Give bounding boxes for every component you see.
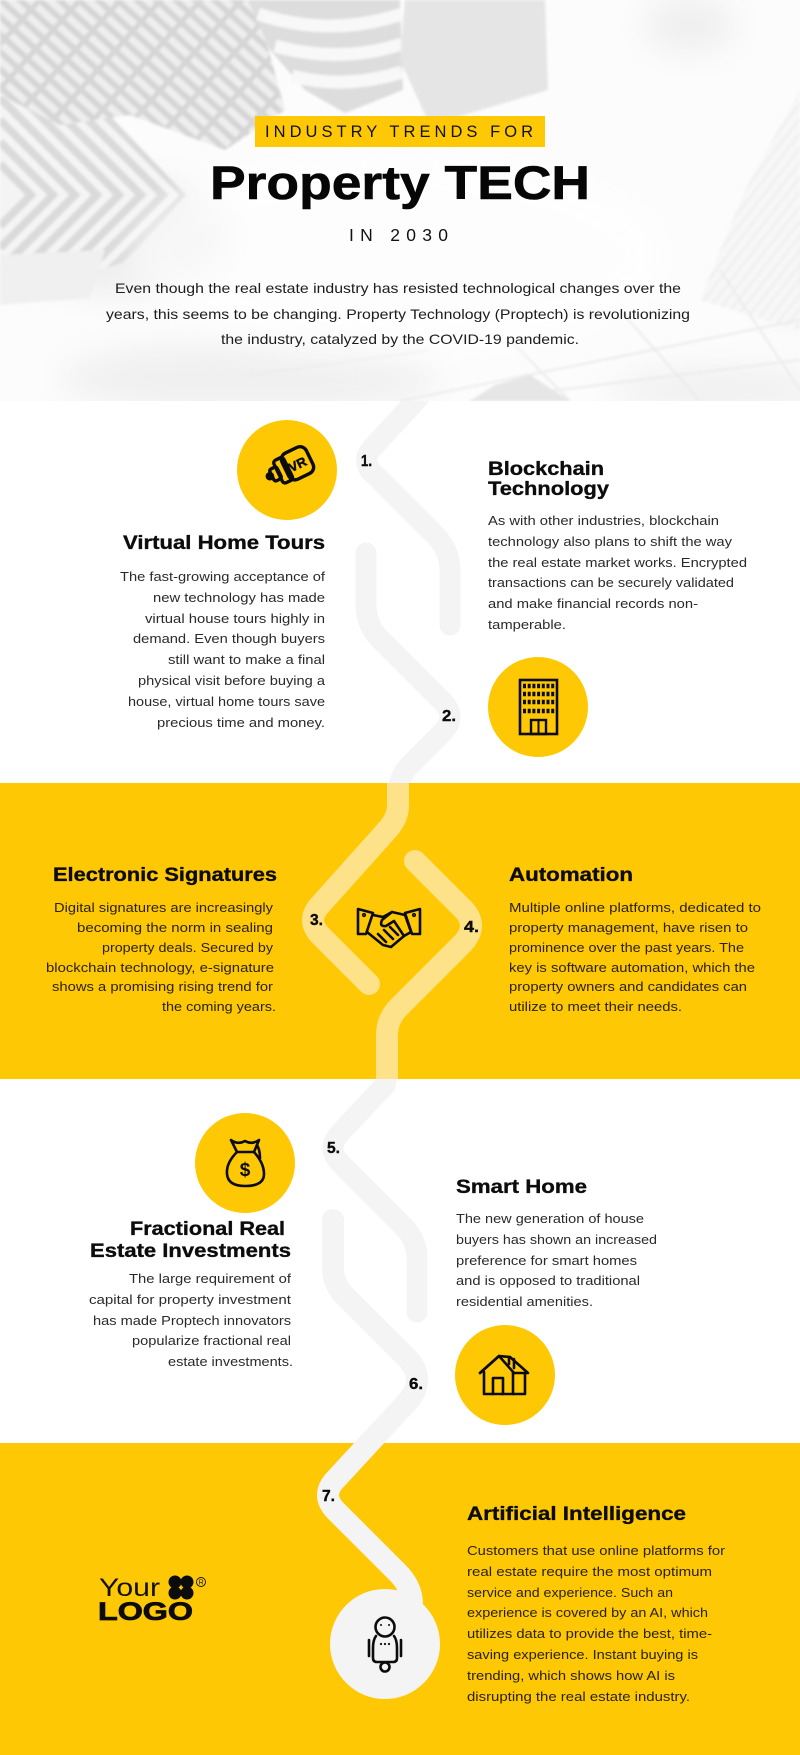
body text: the coming years. xyxy=(162,999,276,1014)
panel: yellow band automation and signatures xyxy=(0,783,800,1079)
panel: yellow band artificial intelligence xyxy=(0,1443,800,1755)
panel: artificial intelligence xyxy=(467,1503,726,1704)
icon: robot xyxy=(330,1589,440,1699)
body text: blockchain technology, e-signature xyxy=(46,960,274,975)
heading: Virtual Home Tours xyxy=(123,532,325,554)
subtitle: IN 2030 xyxy=(349,225,448,245)
road path on white sections xyxy=(333,396,450,1312)
body text: experience is covered by an AI, which xyxy=(467,1605,708,1620)
step numbers: 5. xyxy=(327,1140,340,1157)
main title: Property TECH xyxy=(210,156,590,209)
heading: Blockchain xyxy=(488,458,604,480)
panel: automation xyxy=(509,864,761,1014)
step numbers: 1. xyxy=(361,453,372,470)
icon: office building xyxy=(488,657,588,757)
body text: Multiple online platforms, dedicated to xyxy=(509,900,761,915)
panel: virtual home tours xyxy=(120,420,337,730)
heading tag: industry trends for: INDUSTRY TRENDS FOR xyxy=(265,123,533,141)
body text: trending, which shows how AI is xyxy=(467,1668,675,1683)
heading: Electronic Signatures xyxy=(53,864,277,886)
header xyxy=(106,116,690,347)
intro text: the industry, catalyzed by the COVID-19 pandemic. xyxy=(221,331,579,347)
body text: The large requirement of xyxy=(129,1271,291,1286)
step numbers: 2. xyxy=(442,708,456,725)
body text: real estate require the most optimum xyxy=(467,1564,712,1579)
body text: property owners and candidates can xyxy=(509,979,747,994)
hero background photo xyxy=(0,0,800,414)
body text: has made Proptech innovators xyxy=(93,1313,291,1328)
body text: As with other industries, blockchain xyxy=(488,513,719,528)
panel: blockchain technology xyxy=(488,458,747,757)
body text: prominence over the past years. The xyxy=(509,940,744,955)
body text: residential amenities. xyxy=(456,1294,593,1309)
body text: key is software automation, which the xyxy=(509,960,755,975)
body text xyxy=(467,1543,726,1704)
body text: The fast-growing acceptance of xyxy=(120,569,325,584)
intro text xyxy=(106,280,690,347)
intro text: Even though the real estate industry has resisted technological changes over the xyxy=(115,280,681,296)
body text: property management, have risen to xyxy=(509,920,748,935)
heading tag: industry trends for xyxy=(255,116,545,147)
step numbers: 3. xyxy=(310,912,323,929)
heading: Artificial Intelligence xyxy=(467,1503,686,1525)
body text: virtual house tours highly in xyxy=(145,611,325,626)
body text xyxy=(120,569,326,730)
body text: property deals. Secured by xyxy=(102,940,273,955)
heading: Automation xyxy=(509,864,633,886)
heading xyxy=(90,1218,291,1262)
body text: new technology has made xyxy=(153,590,325,605)
body text: capital for property investment xyxy=(89,1292,291,1307)
icon: money bag xyxy=(195,1113,295,1213)
body text: physical visit before buying a xyxy=(138,673,326,688)
panel: smart home xyxy=(455,1176,657,1425)
body text: buyers has shown an increased xyxy=(456,1232,657,1247)
body text: The new generation of house xyxy=(456,1211,644,1226)
logo: R xyxy=(199,1580,204,1587)
heading: Fractional Real xyxy=(130,1218,285,1240)
body text: tamperable. xyxy=(488,617,566,632)
body text: utilize to meet their needs. xyxy=(509,999,682,1014)
road path into robot circle xyxy=(328,1220,417,1640)
icon: money bag: $ xyxy=(240,1160,251,1181)
step numbers: 7. xyxy=(322,1488,335,1505)
body text xyxy=(46,900,276,1014)
body text: disrupting the real estate industry. xyxy=(467,1689,690,1704)
heading: Technology xyxy=(488,478,609,500)
panel: fractional real estate investments xyxy=(89,1113,295,1369)
body text xyxy=(509,900,761,1014)
body text: and make financial records non- xyxy=(488,596,698,611)
body text: precious time and money. xyxy=(157,715,325,730)
icon: house xyxy=(455,1325,555,1425)
body text: the real estate market works. Encrypted xyxy=(488,555,747,570)
step numbers: 4. xyxy=(464,919,479,936)
heading: Estate Investments xyxy=(90,1240,291,1262)
panel: electronic signatures xyxy=(46,864,277,1014)
body text: demand. Even though buyers xyxy=(133,631,325,646)
body text: estate investments. xyxy=(168,1354,293,1369)
body text: and is opposed to traditional xyxy=(456,1273,640,1288)
body text: transactions can be securely validated xyxy=(488,575,734,590)
icon: vr headset: VR xyxy=(286,453,309,475)
body text: Digital signatures are increasingly xyxy=(54,900,273,915)
road path on yellow band xyxy=(313,770,471,1090)
intro text: years, this seems to be changing. Property Technology (Proptech) is revolutionizing xyxy=(106,306,690,322)
body text: still want to make a final xyxy=(168,652,325,667)
step numbers xyxy=(310,453,479,1505)
body text: becoming the norm in sealing xyxy=(77,920,273,935)
body text: saving experience. Instant buying is xyxy=(467,1647,698,1662)
icon: vr headset xyxy=(237,420,337,520)
body text xyxy=(89,1271,293,1369)
heading: Smart Home xyxy=(456,1176,587,1198)
body text: shows a promising rising trend for xyxy=(52,979,274,994)
logo: Your xyxy=(99,1574,160,1602)
body text xyxy=(456,1211,657,1309)
body text: service and experience. Such an xyxy=(467,1585,673,1600)
logo xyxy=(98,1574,206,1626)
body text: utilizes data to provide the best, time- xyxy=(467,1626,712,1641)
icon: handshake xyxy=(358,909,420,947)
body text: popularize fractional real xyxy=(132,1333,291,1348)
body text: Customers that use online platforms for xyxy=(467,1543,726,1558)
logo: LOGO xyxy=(98,1598,193,1626)
step numbers: 6. xyxy=(409,1376,423,1393)
body text xyxy=(488,513,747,632)
body text: technology also plans to shift the way xyxy=(488,534,732,549)
body text: house, virtual home tours save xyxy=(128,694,325,709)
body text: preference for smart homes xyxy=(456,1253,637,1268)
heading xyxy=(488,458,609,500)
